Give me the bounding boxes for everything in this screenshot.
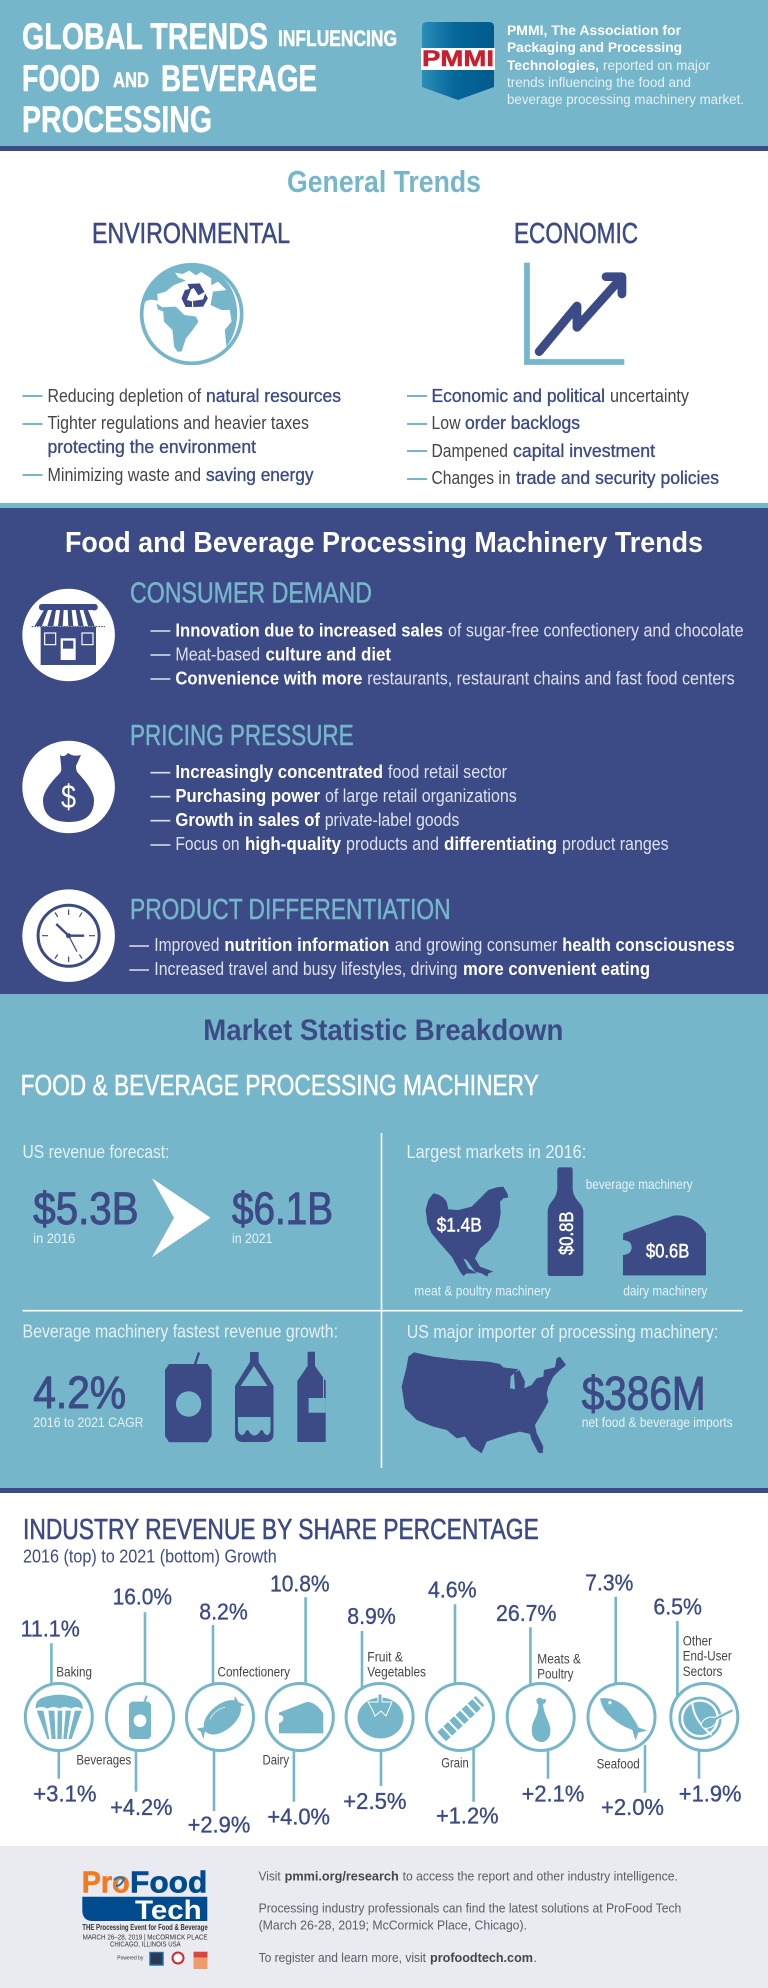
icon: plastic bottle	[235, 1352, 274, 1442]
item: meats and poultry: +2.1%	[522, 1781, 584, 1807]
list: economic trends: Dampened	[432, 440, 508, 461]
item: other sectors: 6.5%	[653, 1594, 702, 1620]
list: economic trends: Low	[432, 412, 461, 433]
logo: ProFood Tech: MARCH 26–28, 2019 | McCORMICK PLACE	[83, 1934, 208, 1941]
text block: footer information: pmmi.org/research	[285, 1869, 399, 1884]
list: consumer demand: restaurants, restaurant chains and fast food centers	[367, 669, 735, 689]
item: grain: Grain	[441, 1754, 469, 1770]
item: confectionery: +2.9%	[188, 1812, 250, 1838]
icon: PMMI shield logo	[421, 22, 495, 100]
list: environmental trends: Tighter regulations and heavier taxes	[48, 412, 309, 433]
item: fruit and vegetables: Vegetables	[367, 1664, 426, 1680]
title: INFLUENCING	[278, 26, 397, 51]
text block: PMMI intro: beverage processing machinery market.	[507, 92, 744, 107]
list: environmental trends: Minimizing waste and	[48, 464, 201, 485]
title: BEVERAGE	[161, 58, 317, 99]
text block: PMMI intro: Technologies,	[507, 58, 599, 73]
panel: industry revenue share	[21, 1514, 742, 1838]
stat: beverage machinery growth	[22, 1322, 338, 1442]
list: product differentiation: health consciousness	[562, 935, 735, 955]
list: economic trends: trade and security policies	[516, 467, 719, 488]
list: product differentiation: Increased travel and busy lifestyles, driving	[154, 959, 458, 979]
stat: beverage machinery growth: 2016 to 2021 CAGR	[33, 1414, 143, 1430]
title: AND	[113, 69, 149, 92]
icon: bottle	[548, 1167, 583, 1276]
heading: industry revenue: INDUSTRY REVENUE BY SHARE PERCENTAGE	[23, 1514, 539, 1546]
list: consumer demand: Convenience with more	[175, 669, 362, 689]
icon: chicken	[426, 1187, 508, 1277]
panel: machinery trends	[0, 503, 768, 994]
list: product differentiation: Improved	[154, 935, 219, 955]
icon: glass bottle	[297, 1352, 326, 1442]
heading: general trends: General Trends	[287, 164, 481, 199]
stat: US revenue forecast: $6.1B	[232, 1183, 333, 1234]
item: dairy	[262, 1570, 333, 1829]
list: pricing pressure: Increasingly concentrated	[175, 762, 383, 782]
list: environmental trends: protecting the environment	[48, 436, 256, 457]
item: grain	[426, 1576, 499, 1828]
list: pricing pressure: Purchasing power	[175, 786, 320, 806]
title: GLOBAL TRENDS	[22, 16, 268, 57]
list: product differentiation: more convenient eating	[463, 959, 650, 979]
list: economic trends: uncertainty	[610, 385, 690, 406]
list: pricing pressure: high-quality	[245, 834, 341, 854]
list: economic trends: Changes in	[432, 467, 510, 488]
heading: environmental: ENVIRONMENTAL	[92, 218, 290, 250]
stat: largest markets	[406, 1142, 707, 1299]
icon: clock	[22, 889, 115, 982]
item: meats and poultry	[496, 1600, 584, 1807]
list: product differentiation: nutrition information	[224, 935, 389, 955]
item: confectionery: 8.2%	[199, 1598, 248, 1624]
item: meats and poultry: Meats &	[537, 1650, 582, 1666]
item: dairy: 10.8%	[270, 1570, 330, 1596]
list: pricing pressure: Focus on	[175, 834, 240, 854]
text block: footer information: To register and learn more, visit	[259, 1950, 426, 1965]
heading: consumer demand: CONSUMER DEMAND	[130, 578, 372, 610]
heading: machinery trends: Food and Beverage Processing Machinery Trends	[65, 527, 703, 559]
title: FOOD	[22, 58, 100, 99]
item: baking: 11.1%	[21, 1616, 80, 1642]
title: PROCESSING	[22, 99, 212, 140]
heading: food and beverage machinery: FOOD & BEVERAGE PROCESSING MACHINERY	[21, 1070, 539, 1102]
logo: ProFood Tech: CHICAGO, ILLINOIS USA	[110, 1942, 181, 1949]
item: fruit and vegetables: 8.9%	[347, 1603, 396, 1629]
item: meats and poultry: Poultry	[537, 1665, 574, 1681]
stat: US imports	[402, 1322, 733, 1453]
item: baking: +3.1%	[33, 1781, 96, 1807]
connector lines	[51, 1597, 699, 1811]
list: pricing pressure: products and	[346, 834, 439, 854]
text block: footer information: profoodtech.com	[430, 1950, 533, 1965]
list: economic trends: order backlogs	[465, 412, 580, 433]
list: product differentiation	[129, 935, 735, 979]
stat: beverage machinery growth: 4.2%	[33, 1367, 126, 1418]
item: other sectors: Sectors	[683, 1663, 722, 1679]
stat: largest markets: Largest markets in 2016:	[406, 1142, 586, 1162]
list: environmental trends: saving energy	[206, 464, 314, 485]
text block: footer information: to access the report and other industry intelligence.	[403, 1869, 678, 1884]
item: beverages: 16.0%	[113, 1583, 172, 1609]
list: environmental trends: Reducing depletion of	[48, 385, 202, 406]
item: fruit and vegetables	[343, 1603, 426, 1814]
stat: largest markets: $1.4B	[437, 1216, 482, 1237]
stat: US revenue forecast: in 2016	[33, 1230, 75, 1246]
panel: footer	[0, 1846, 768, 1988]
stat: beverage machinery growth: Beverage machinery fastest revenue growth:	[22, 1322, 338, 1342]
text block: footer information: Processing industry professionals can find the latest solutions at ProFood Tech	[259, 1901, 681, 1916]
text block: PMMI intro: Packaging and Processing	[507, 40, 682, 55]
panel: market statistics	[0, 994, 768, 1493]
text block: PMMI intro	[507, 23, 744, 107]
list: pricing pressure: private-label goods	[325, 810, 459, 830]
stat: largest markets: meat & poultry machinery	[414, 1283, 551, 1299]
list: pricing pressure	[150, 762, 669, 854]
item: fruit and vegetables: Fruit &	[367, 1649, 404, 1665]
item: other sectors	[653, 1594, 742, 1807]
icon: PMMI shield logo: PMMI	[422, 46, 494, 71]
item: fruit and vegetables: +2.5%	[343, 1788, 406, 1814]
stat: largest markets: dairy machinery	[623, 1283, 707, 1299]
list: consumer demand	[150, 621, 743, 689]
list: consumer demand: Innovation due to increased sales	[175, 621, 443, 641]
stat: largest markets: beverage machinery	[586, 1176, 693, 1192]
icon: globe with recycle symbol	[142, 265, 242, 363]
list: environmental trends: natural resources	[206, 385, 341, 406]
item: confectionery	[186, 1598, 290, 1838]
item: other sectors: End-User	[683, 1648, 732, 1664]
list: economic trends: Economic and political	[432, 385, 605, 406]
stat: US imports: net food & beverage imports	[582, 1414, 733, 1430]
list: pricing pressure: food retail sector	[388, 762, 507, 782]
logo: ProFood Tech: THE Processing Event for Food & Beverage	[82, 1923, 208, 1932]
item: seafood	[585, 1570, 664, 1820]
text block: PMMI intro: reported on major	[603, 58, 711, 73]
subheading: growth: 2016 (top) to 2021 (bottom) Growth	[23, 1547, 277, 1567]
text block: PMMI intro: trends influencing the food and	[507, 75, 691, 90]
item: beverages: +4.2%	[110, 1794, 172, 1820]
stat: US revenue forecast	[22, 1142, 333, 1257]
logo: ProFood Tech: Tech	[135, 1895, 202, 1925]
item: seafood: Seafood	[597, 1755, 640, 1771]
panel: general trends	[22, 164, 719, 488]
heading: pricing pressure: PRICING PRESSURE	[130, 720, 354, 752]
text block: footer information: Visit	[259, 1869, 281, 1884]
list: pricing pressure: differentiating	[444, 834, 557, 854]
item: meats and poultry: 26.7%	[496, 1600, 556, 1626]
icon: growth chart arrow	[527, 263, 624, 362]
text block: footer information	[259, 1869, 681, 1965]
heading: economic: ECONOMIC	[514, 218, 638, 250]
stat: US revenue forecast: $5.3B	[33, 1183, 139, 1234]
list: economic trends: capital investment	[513, 440, 655, 461]
arrow	[152, 1178, 211, 1257]
logo: ProFood Tech: Powered by	[117, 1955, 144, 1961]
list: pricing pressure: of large retail organizations	[325, 786, 517, 806]
item: seafood: 7.3%	[585, 1570, 633, 1596]
icon: soda can	[165, 1352, 212, 1442]
text block: PMMI intro: PMMI, The Association for	[507, 23, 682, 38]
logo: ProFood Tech: Food	[130, 1865, 207, 1900]
item: grain: 4.6%	[428, 1576, 477, 1602]
list: product differentiation: and growing consumer	[395, 935, 557, 955]
list: environmental trends	[22, 385, 341, 485]
text block: footer information: (March 26-28, 2019; McCormick Place, Chicago).	[259, 1917, 527, 1932]
list: pricing pressure: Growth in sales of	[175, 810, 321, 830]
icon: storefront	[22, 589, 115, 681]
list: pricing pressure: product ranges	[562, 834, 669, 854]
item: confectionery: Confectionery	[218, 1664, 290, 1680]
heading: product differentiation: PRODUCT DIFFERENTIATION	[130, 894, 451, 926]
icon: cheese	[623, 1215, 706, 1275]
stat: largest markets: $0.6B	[646, 1241, 689, 1262]
logo: ProFood Tech	[82, 1865, 208, 1969]
panel: header	[0, 0, 768, 151]
icon: map of USA	[402, 1352, 566, 1453]
list: consumer demand: culture and diet	[266, 645, 391, 665]
title	[22, 16, 397, 140]
item: dairy: Dairy	[262, 1751, 289, 1767]
icon: money bag: $	[61, 778, 76, 815]
item: seafood: +2.0%	[601, 1794, 664, 1820]
item: grain: +1.2%	[436, 1802, 499, 1828]
stat: largest markets: $0.8B	[557, 1212, 578, 1255]
list: consumer demand: Meat-based	[175, 645, 260, 665]
item: beverages	[76, 1583, 174, 1820]
list: economic trends	[407, 385, 719, 488]
stat: US imports: $386M	[582, 1366, 706, 1419]
icon: money bag	[22, 741, 115, 833]
stat: US revenue forecast: in 2021	[232, 1230, 273, 1246]
item: baking: Baking	[56, 1664, 92, 1680]
item: beverages: Beverages	[76, 1751, 131, 1767]
text block: footer information: .	[534, 1950, 537, 1965]
item: other sectors: Other	[683, 1633, 712, 1649]
heading: market statistic breakdown: Market Statistic Breakdown	[203, 1014, 563, 1047]
stat: US imports: US major importer of processing machinery:	[407, 1322, 718, 1342]
item: other sectors: +1.9%	[679, 1781, 742, 1807]
logo: ProFood Tech: Pro	[82, 1865, 130, 1900]
stat: US revenue forecast: US revenue forecast:	[22, 1142, 170, 1162]
item: baking	[21, 1616, 97, 1807]
item: dairy: +4.0%	[267, 1803, 330, 1829]
